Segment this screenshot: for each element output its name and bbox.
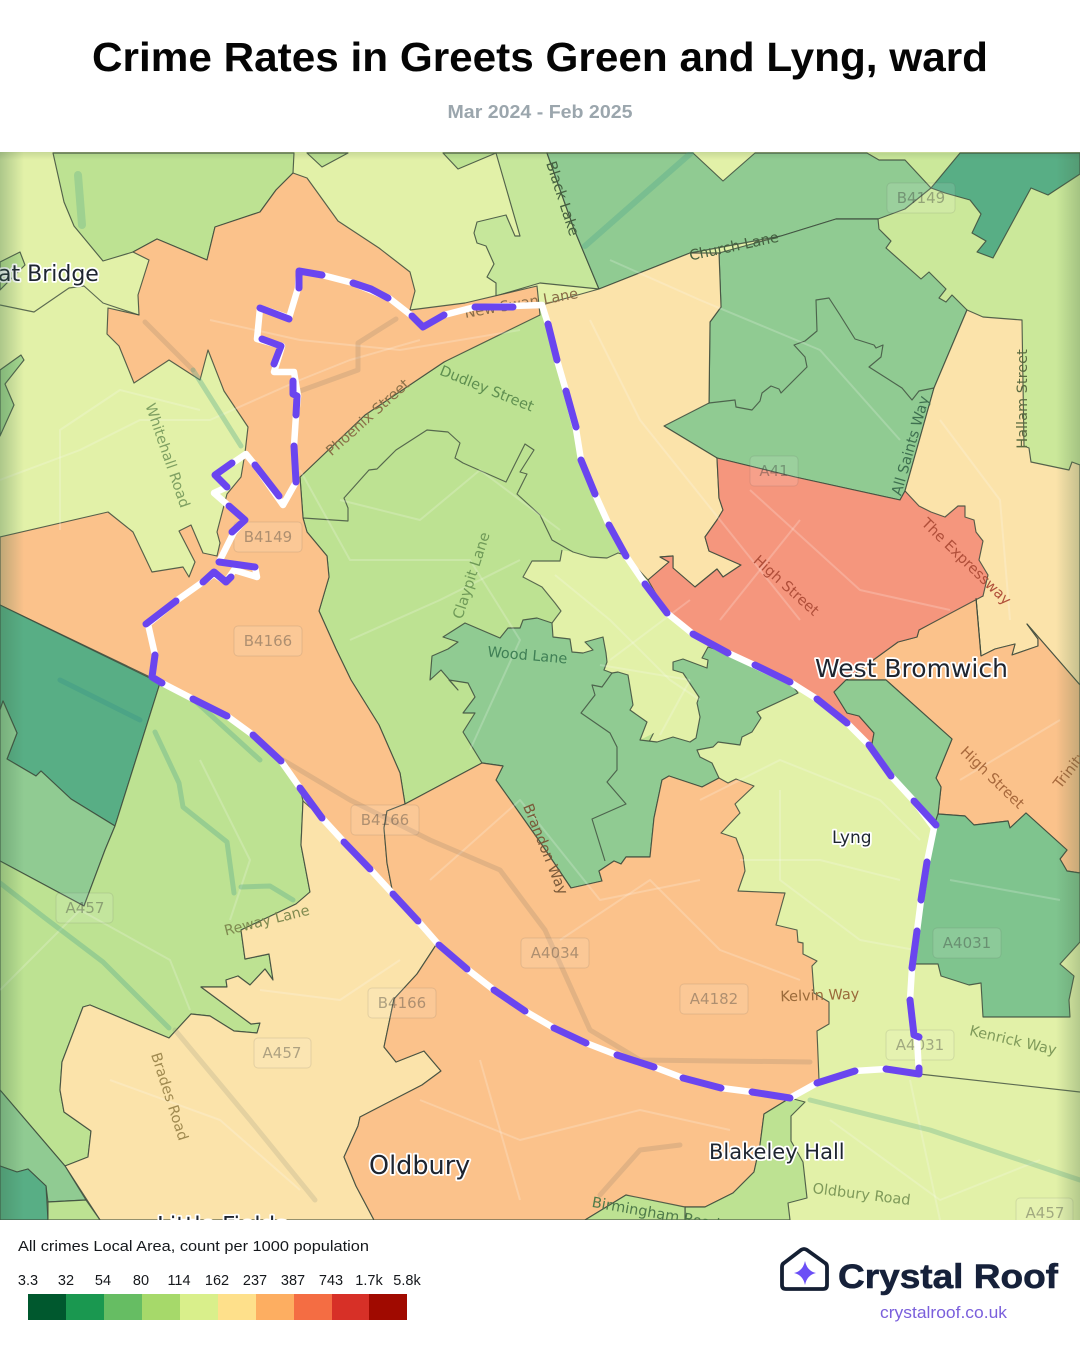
street names (141, 159, 1080, 1233)
street names: Kenrick Way (968, 1023, 1058, 1059)
road number shields: A41 (759, 462, 789, 480)
street names: Birmingham Road (591, 1195, 721, 1233)
road number shields (56, 183, 1073, 1228)
legend scale values: 32 (58, 1273, 74, 1289)
legend scale values: 743 (319, 1273, 343, 1289)
street network (0, 260, 1060, 1220)
street names: High Street (750, 553, 822, 620)
legend scale values: 237 (243, 1273, 267, 1289)
road number shields: B4166 (378, 994, 426, 1012)
legend scale values: 3.3 (18, 1273, 38, 1289)
place names: West Bromwich (815, 654, 1008, 683)
website: crystalroof.co.uk (880, 1304, 1008, 1322)
legend scale values (18, 1273, 421, 1289)
place names: at Bridge (0, 262, 99, 287)
road number shields: A457 (263, 1044, 301, 1062)
street names: High Street (957, 744, 1027, 813)
legend scale values: 114 (167, 1273, 191, 1289)
map areas (0, 153, 1080, 1220)
purple dashes (146, 271, 936, 1098)
place names: Little Fields (157, 1213, 287, 1239)
railway and canal lines (0, 153, 1080, 1200)
road number shields: B4149 (897, 189, 945, 207)
road number shields: A457 (1026, 1204, 1064, 1222)
legend scale values: 387 (281, 1273, 305, 1289)
street names: Oldbury Road (812, 1181, 911, 1209)
street names: Kelvin Way (780, 987, 860, 1005)
legend title: All crimes Local Area, count per 1000 population (18, 1238, 369, 1255)
street names: Phoenix Street (324, 376, 413, 460)
ward boundary: white line with purple dashes (146, 271, 936, 1098)
map edge vignette (0, 152, 1080, 1220)
street names: New Swan Lane (463, 286, 579, 322)
place names: Oldbury (369, 1151, 470, 1181)
place names: Blakeley Hall (709, 1140, 845, 1164)
place names (0, 262, 1008, 1239)
street names: Black Lake (542, 159, 581, 238)
street names: Dudley Street (437, 363, 536, 416)
road number shields: A4031 (896, 1036, 944, 1054)
wordmark: Crystal Roof (838, 1258, 1059, 1296)
road number shields: B4166 (361, 811, 409, 829)
street names: Brandon Way (519, 802, 570, 898)
street names: All Saints Way (889, 394, 933, 497)
street names: The Expressway (917, 515, 1014, 609)
logo: Crystal Roof (782, 1249, 1059, 1322)
street names: Brades Road (147, 1051, 191, 1143)
road number shields: B4166 (244, 632, 292, 650)
legend scale values: 80 (133, 1273, 149, 1289)
street names: Church Lane (688, 230, 780, 264)
road number shields: A4182 (690, 990, 738, 1008)
legend (18, 1238, 421, 1320)
legend scale values: 1.7k (355, 1273, 383, 1289)
subtitle: date range: Mar 2024 - Feb 2025 (448, 102, 632, 122)
road number shields: A4034 (531, 944, 579, 962)
street names: Whitehall Road (141, 401, 192, 510)
legend scale values: 162 (205, 1273, 229, 1289)
street names: Hallam Street (1015, 349, 1031, 449)
road number shields: B4149 (244, 528, 292, 546)
street names: Reway Lane (223, 903, 311, 939)
legend scale values: 54 (95, 1273, 111, 1289)
street names: Wood Lane (487, 645, 568, 667)
place names: Lyng (832, 828, 872, 848)
road number shields: A4031 (943, 934, 991, 952)
road number shields: A457 (66, 899, 104, 917)
street names: Claypit Lane (451, 530, 494, 621)
icon: house with star (782, 1249, 827, 1289)
legend colour swatches (28, 1294, 407, 1320)
legend scale values: 5.8k (393, 1273, 421, 1289)
area boundary lines (0, 286, 1080, 1092)
title: Crime Rates in Greets Green and Lyng, ward (92, 34, 988, 80)
